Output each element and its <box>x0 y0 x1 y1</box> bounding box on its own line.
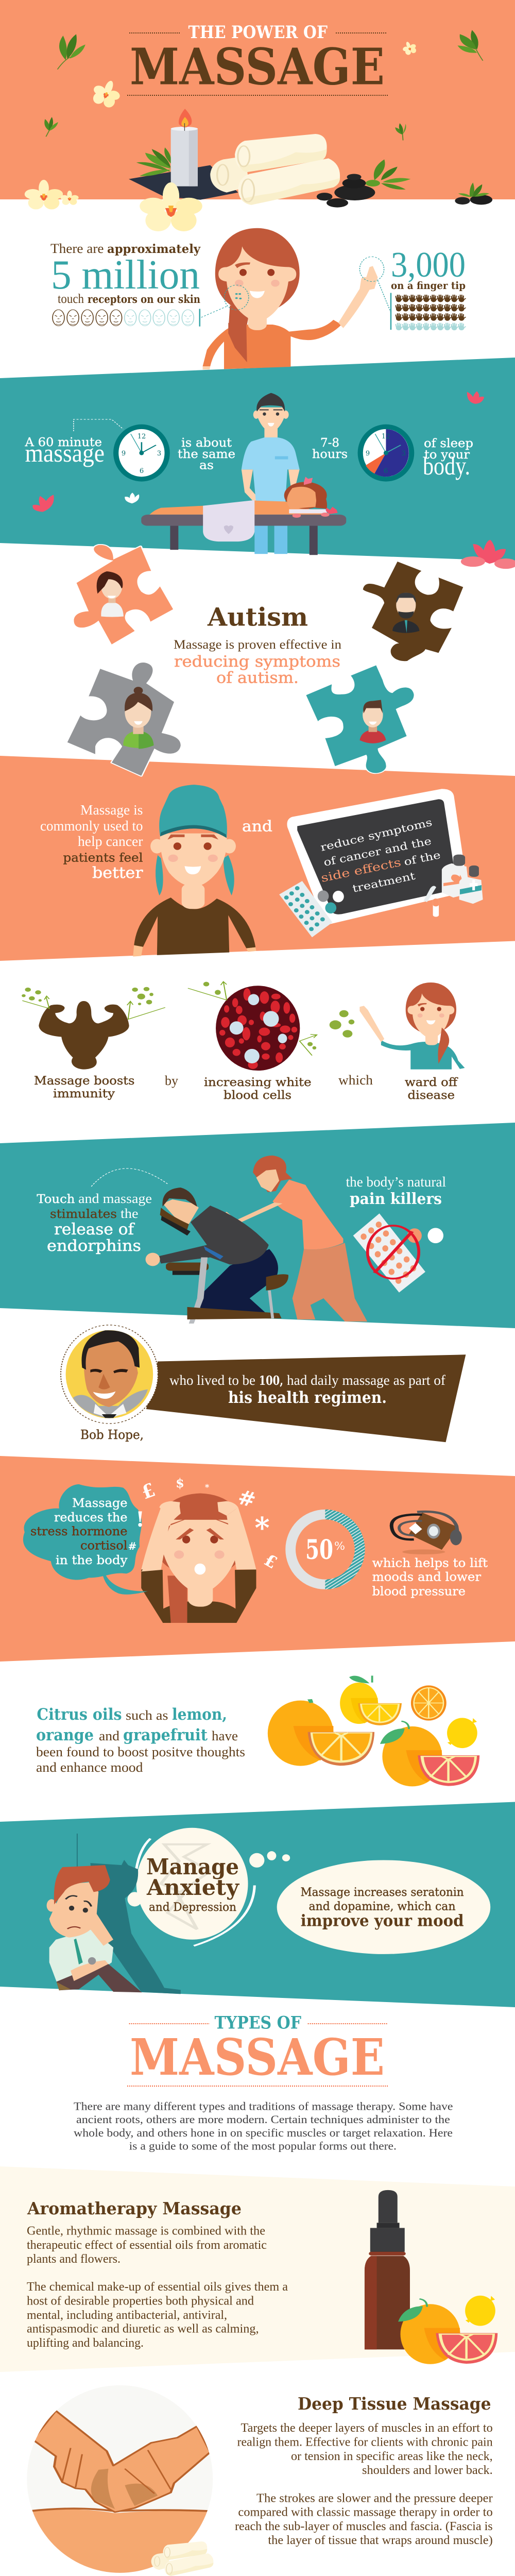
text: chalkboard message: of the <box>403 849 442 868</box>
text: autism statement: Massage is proven effective in <box>174 638 342 652</box>
text: serotonin message <box>301 1886 464 1930</box>
text: touch and massage stimulates endorphins: Touch <box>37 1193 75 1206</box>
illustration: woman body <box>203 266 377 369</box>
text: autism statement: of autism. <box>216 669 299 687</box>
icon: small leaves right <box>395 123 406 140</box>
section: deep tissue <box>20 2385 493 2576</box>
section: puzzle pieces and cancer illustrations <box>67 663 483 957</box>
text: aromatherapy body: mental, including antibacterial, antiviral, <box>27 2309 227 2322</box>
text: clock 1 numbers: 3 <box>157 450 161 457</box>
text: clock 1 numbers: 12 <box>138 433 146 440</box>
text: chalkboard message: treatment <box>351 870 416 895</box>
icon: face row bar <box>199 309 200 327</box>
icon: face row brown <box>53 310 122 326</box>
text: manage anxiety: Anxiety <box>146 1875 240 1900</box>
icon: stress symbols: $ <box>176 1476 184 1490</box>
text: manage anxiety <box>146 1854 240 1914</box>
icon: leaves behind candle <box>136 147 171 176</box>
text: massage helps cancer patients: Massage is <box>80 802 143 818</box>
callout: thought bubble manage anxiety <box>101 1828 290 1946</box>
text: touch and massage stimulates endorphins: endorphins <box>47 1237 141 1255</box>
heading: aromatherapy massage: Aromatherapy Massage <box>27 2198 242 2218</box>
icon: leaves top right <box>457 30 483 61</box>
illustration: woman head <box>215 228 300 323</box>
text: clock 1 numbers: 6 <box>140 467 144 475</box>
icon: flower left <box>25 180 63 209</box>
text: increasing white blood cells: blood cells <box>224 1089 291 1102</box>
title: MASSAGE <box>130 37 385 96</box>
icon: orange puzzle piece <box>74 545 173 645</box>
icon: orange leaf grapefruit and lemon <box>380 1718 479 1786</box>
icon: green germs <box>330 1010 354 1038</box>
text: five million receptors: touch <box>58 292 84 306</box>
icon: green arrows by blood cell <box>188 981 317 1056</box>
text: speech bubble message: Massage <box>72 1497 128 1510</box>
text: 7-8 hours: 7-8 <box>320 436 339 450</box>
panel: orange band cancer <box>0 756 515 961</box>
text: 60 minute massage: massage <box>25 438 105 467</box>
text: banner quote: his health regimen. <box>228 1388 387 1407</box>
text: by: by <box>165 1073 178 1088</box>
icon: leaves top left <box>58 34 85 70</box>
text: autism statement <box>174 638 342 687</box>
callout: dashed cheek circle <box>200 285 249 318</box>
text: touch and massage stimulates endorphins <box>37 1191 152 1255</box>
text: deep tissue body: The strokes are slower and the pressure deeper <box>256 2492 493 2505</box>
text: is about the same as: as <box>199 459 214 472</box>
text: banner quote: 100, <box>259 1373 283 1388</box>
text: 3000 on a finger tip: 3,000 <box>391 245 466 285</box>
text: speech bubble message: stress hormone <box>30 1525 128 1538</box>
text: five million receptors: receptors on our skin <box>88 293 200 306</box>
illustration: anxious man <box>47 1834 181 1994</box>
section: Bob Hope <box>23 1325 466 1623</box>
text: natural pain killers: pain killers <box>350 1190 442 1208</box>
panel: teal band 60 minute massage <box>0 358 515 561</box>
heading: types of massage: TYPES OF <box>214 2012 301 2033</box>
text: 60 minute massage: A 60 minute <box>24 436 102 449</box>
text: speech bubble message <box>30 1497 128 1567</box>
text: of sleep to your body: of sleep <box>424 437 473 450</box>
icon: finger tip hand grid <box>390 293 466 330</box>
text: citrus oils: orange <box>36 1726 94 1744</box>
text: five million receptors: approximately <box>107 242 201 256</box>
text: massage boosts immunity: immunity <box>53 1088 115 1100</box>
text: citrus oils: and <box>99 1728 119 1743</box>
illustration: chalkboard with pills <box>279 789 483 937</box>
heading: autism: Autism <box>207 602 308 632</box>
text: chalkboard message: side effects <box>320 856 402 885</box>
text: citrus oils: such as <box>126 1708 168 1723</box>
illustration: woman warding off disease <box>359 982 465 1070</box>
callout: dashed finger circle <box>359 257 391 313</box>
text: clock 2 numbers: 9 <box>366 450 370 457</box>
arrow: dashed arc above client <box>91 1168 167 1187</box>
text: lift moods: moods and lower <box>372 1570 481 1584</box>
text: 50 percent: % <box>334 1540 345 1552</box>
text: deep tissue body: realign them. Effective for clients with chronic pain <box>237 2436 493 2449</box>
text: is about the same as <box>178 436 235 472</box>
text: types intro paragraph: ancient roots, others are more modern. Certain techniques administer to the <box>76 2113 450 2126</box>
text: citrus oils <box>36 1705 245 1775</box>
text: types intro paragraph: There are many different types and traditions of massage therapy. Some have <box>74 2099 453 2112</box>
text: natural pain killers <box>346 1174 446 1208</box>
text: citrus oils: been found to boost positve thoughts <box>36 1744 245 1759</box>
icon: orange with slice <box>268 1699 374 1766</box>
icon: muscle silhouette <box>39 1001 129 1070</box>
text: aromatherapy body: The chemical make-up of essential oils gives them a <box>27 2280 288 2294</box>
text: is about the same as: the same <box>178 448 235 461</box>
callout: teal speech bubble <box>23 1484 142 1580</box>
icon: face row teal <box>125 310 194 326</box>
text: citrus oils: Citrus oils <box>37 1705 122 1724</box>
text: banner quote: who lived to be <box>169 1372 255 1388</box>
icon: essential oil dropper bottle <box>365 2190 410 2349</box>
icon: flower large <box>140 182 202 231</box>
text: touch and massage stimulates endorphins: stimulates <box>50 1208 117 1221</box>
text: clock 2 numbers: 6 <box>384 467 388 475</box>
text: clock 2 numbers: 3 <box>402 450 406 457</box>
text: serotonin message: Massage increases seratonin <box>301 1886 464 1899</box>
icon: grey puzzle piece <box>67 663 181 776</box>
text: aromatherapy body: plants and flowers. <box>27 2252 121 2266</box>
illustration: stress woman <box>141 1493 256 1623</box>
text: speech bubble message: in the body <box>56 1554 128 1567</box>
icon: stress symbols: £ <box>261 1550 281 1572</box>
text: deep tissue body: shoulders and lower back. <box>362 2464 493 2477</box>
icon: flower by title right <box>401 40 418 56</box>
text: touch and massage stimulates endorphins: release of <box>54 1221 135 1239</box>
section: touch receptors woman <box>53 228 466 369</box>
text: 3000 on a finger tip: on a finger tip <box>391 279 466 292</box>
icon: stress symbols <box>128 1476 281 1572</box>
text: of sleep to your body: body. <box>423 451 470 480</box>
text: massage boosts immunity: Massage boosts <box>34 1075 135 1088</box>
text: aromatherapy body <box>27 2225 288 2350</box>
text: deep tissue body <box>235 2421 493 2547</box>
text: chalkboard message <box>319 816 442 895</box>
illustration: chair massage <box>146 1156 367 1324</box>
section: citrus and anxiety illustrations <box>47 1675 490 1994</box>
icon: blood cells circle <box>216 986 300 1071</box>
icon: stress symbols: * <box>254 1511 270 1545</box>
text: banner quote <box>169 1372 445 1407</box>
icon: clock 60 minutes <box>113 425 170 482</box>
icon: brown puzzle piece <box>363 562 463 661</box>
text: chalkboard message: reduce symptoms <box>319 816 433 854</box>
text: touch and massage stimulates endorphins: and massage <box>78 1191 152 1206</box>
panel: cream band aromatherapy <box>0 2166 515 2372</box>
panel: teal band endorphins <box>0 1123 515 1328</box>
text: clock 2 numbers: 12 <box>382 433 390 440</box>
text: natural pain killers: the body’s natural <box>346 1174 446 1190</box>
section: aromatherapy <box>27 2190 497 2364</box>
section: 60 minute massage illustration <box>32 391 515 661</box>
icon: pink flower bottom right <box>461 540 515 569</box>
text: chalkboard message: of cancer and the <box>322 835 433 869</box>
text: ward off disease <box>405 1076 458 1102</box>
text: speech bubble message: reduces the <box>54 1511 128 1524</box>
panel: orange band cortisol <box>0 1456 515 1662</box>
text: clock 1 numbers <box>122 433 161 475</box>
icon: rolled towels <box>210 134 340 205</box>
icon: stones and leaves right <box>455 182 492 205</box>
icon: cheek dots <box>235 293 242 299</box>
text: types intro paragraph: whole body, and others hone in on specific muscles or target relaxation. Here <box>74 2126 453 2139</box>
text: banner quote: had daily massage as part of <box>287 1372 445 1388</box>
text: types intro paragraph <box>74 2099 453 2153</box>
text: 50 percent: 50 <box>305 1534 333 1566</box>
icon: citrus beside bottle <box>398 2296 497 2364</box>
text: 7-8 hours <box>312 436 348 461</box>
callout: brown banner <box>146 1354 466 1442</box>
text: five million receptors <box>50 241 201 306</box>
icon: crossed out pills <box>353 1213 443 1293</box>
text: lift moods: blood pressure <box>372 1585 466 1599</box>
text: clock 2 numbers <box>366 433 406 475</box>
panel: header background <box>0 0 515 199</box>
icon: clock sleep hours <box>358 425 414 482</box>
icon: hot stones <box>317 174 375 208</box>
text: deep tissue body: the layer of tissue that wraps around muscle) <box>268 2534 493 2547</box>
icon: stress symbols: # <box>128 1540 136 1552</box>
text: aromatherapy body: Gentle, rhythmic massage is combined with the <box>27 2225 265 2238</box>
text: of sleep to your body <box>423 437 473 480</box>
text: ward off disease: disease <box>408 1089 455 1102</box>
icon: blood pressure monitor <box>391 1512 462 1554</box>
text: five million receptors: 5 million <box>51 252 200 298</box>
text: clock 1 numbers: 9 <box>122 450 126 457</box>
text: lift moods <box>372 1557 488 1599</box>
panel: teal band anxiety <box>0 1802 515 2007</box>
text: aromatherapy body: host of desirable properties both physical and <box>27 2295 254 2308</box>
icon: flower tiny <box>60 191 79 205</box>
text: ward off disease: ward off <box>405 1076 458 1089</box>
illustration: Bob Hope portrait <box>61 1325 158 1423</box>
text: Bob Hope caption: Bob Hope, <box>80 1428 144 1442</box>
text: deep tissue body: reach the sub-layer of muscles and fascia. (Fascia is <box>235 2520 493 2533</box>
arrow: speech bubble tail <box>102 1569 148 1595</box>
icon: stress symbols: ! <box>135 1507 145 1532</box>
icon: candle <box>171 109 198 187</box>
text: massage helps cancer patients: patients feel <box>63 852 143 865</box>
text: serotonin message: improve your mood <box>301 1912 464 1930</box>
text: massage helps cancer patients: commonly used to <box>40 818 143 834</box>
illustration: masseur and client on table <box>141 393 346 555</box>
heading: deep tissue massage: Deep Tissue Massage <box>298 2394 491 2414</box>
icon: leaves by stones <box>366 159 410 190</box>
icon: teal puzzle piece <box>306 665 414 773</box>
icon: orange round slice <box>411 1685 447 1721</box>
icon: stress symbols: £ <box>139 1479 158 1504</box>
text: massage boosts immunity <box>34 1075 135 1100</box>
icon: green arrows and dots around muscles <box>22 987 165 1019</box>
text: citrus oils: and enhance mood <box>36 1760 143 1775</box>
text: manage anxiety: and Depression <box>149 1901 236 1914</box>
icon: stress symbols: * <box>205 1482 210 1492</box>
text: of sleep to your body: to your <box>424 448 470 462</box>
text: aromatherapy body: therapeutic effect of essential oils from aromatic <box>27 2239 267 2252</box>
text: five million receptors: There are <box>50 241 104 256</box>
heading: types of massage: MASSAGE <box>130 2028 385 2087</box>
text: speech bubble message: cortisol <box>80 1539 128 1552</box>
callout: oval serotonin message <box>277 1860 490 1954</box>
text: massage helps cancer patients: better <box>92 864 143 882</box>
text: manage anxiety: Manage <box>146 1854 239 1879</box>
text: is about the same as: is about <box>181 436 232 450</box>
icon: pink flowers <box>32 391 484 512</box>
text: which: which <box>338 1073 373 1088</box>
text: and: and <box>242 818 272 835</box>
text: deep tissue body: compared with classic massage therapy in order to <box>238 2506 493 2519</box>
illustration: cancer patient woman <box>133 785 256 957</box>
icon: dark cloth <box>129 165 238 200</box>
text: citrus oils: lemon, <box>172 1705 227 1724</box>
text: massage helps cancer patients: help cancer <box>78 834 143 849</box>
text: touch and massage stimulates endorphins: the <box>121 1206 138 1221</box>
illustration: spa still life with candle, towels and stones <box>44 30 492 208</box>
text: citrus oils: have <box>212 1728 238 1743</box>
text: increasing white blood cells <box>204 1076 312 1102</box>
text: types intro paragraph: is a guide to some of the most popular forms out there. <box>129 2140 397 2153</box>
illustration: hands on back <box>20 2385 224 2576</box>
icon: stress symbols: # <box>235 1485 259 1513</box>
icon: flower by title left <box>89 76 124 110</box>
arrow: dashed pointer to clock <box>74 419 123 431</box>
text: serotonin message: and dopamine, which can <box>309 1901 456 1913</box>
title: THE POWER OF <box>188 22 328 43</box>
text: aromatherapy body: antispasmodic and diuretic as well as calming, <box>27 2323 259 2336</box>
text: lift moods: which helps to lift <box>372 1557 488 1570</box>
text: deep tissue body: or tension in specific areas like the neck, <box>291 2450 493 2463</box>
icon: small leaves left <box>44 117 58 137</box>
icon: lemon with slice <box>340 1675 402 1725</box>
text: citrus oils: grapefruit <box>123 1726 208 1744</box>
text: massage helps cancer patients <box>40 802 143 882</box>
text: 7-8 hours: hours <box>312 448 348 461</box>
section: immunity and endorphins illustrations <box>22 981 465 1324</box>
chart: 50 percent donut <box>285 1510 365 1589</box>
text: deep tissue body: Targets the deeper layers of muscles in an effort to <box>241 2421 493 2435</box>
text: increasing white blood cells: increasing white <box>204 1076 312 1089</box>
text: aromatherapy body: uplifting and balancing. <box>27 2336 144 2350</box>
text: autism statement: reducing symptoms <box>174 653 340 671</box>
